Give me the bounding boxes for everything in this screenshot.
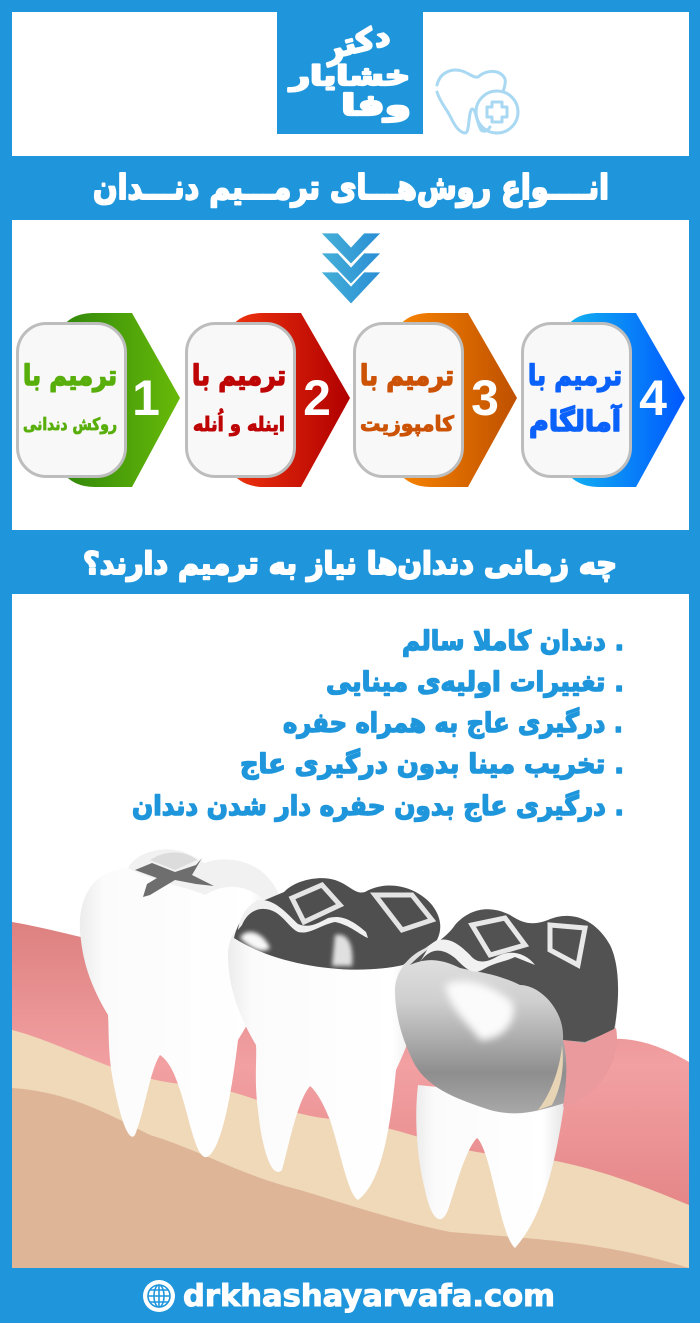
card 1: crown: روکش دندانی (23, 415, 117, 435)
tooth: first with small filling (80, 849, 281, 1157)
icon: globe (143, 1280, 175, 1312)
logo block (277, 12, 423, 134)
text block: list of conditions: . تغییرات اولیه‌ی مینایی (326, 667, 624, 698)
card 4: amalgam: آمالگام (529, 404, 622, 438)
text block: list of conditions: . درگیری عاج بدون حفره دار شدن دندان (132, 790, 624, 822)
panel: symptoms and illustration (12, 594, 689, 1268)
card 3: composite: 3 (471, 370, 499, 426)
card 2: inlay and onlay: ترمیم با (192, 359, 286, 392)
tooth: third with metal crown (395, 909, 618, 1248)
card 3: composite: کامپوزیت (360, 412, 455, 436)
card 4: amalgam: 4 (639, 370, 667, 426)
tooth: second with large filling (228, 878, 440, 1200)
text block: list of conditions (132, 626, 624, 822)
card 2: inlay and onlay: اینله و اُنله (193, 409, 285, 436)
heading: main title: انــــواع روش‌هـــای ترمـــیم دنـــدان (93, 168, 609, 208)
panel: restoration types (12, 220, 689, 530)
text block: list of conditions: . درگیری عاج به همراه حفره (283, 707, 623, 739)
card 3: composite: ترمیم با (360, 359, 454, 392)
card 2: inlay and onlay: 2 (303, 370, 331, 426)
gum tissue (12, 922, 689, 1210)
illustration: three restored teeth in gum (12, 849, 689, 1268)
card 1: crown: ترمیم با (23, 359, 117, 392)
logo block: خشایار (287, 61, 410, 92)
card 1: crown (18, 313, 180, 487)
logo block: وفا (341, 88, 411, 122)
footer: website (143, 1279, 555, 1314)
panel: header (12, 12, 689, 156)
card 1: crown: 1 (132, 370, 160, 426)
card 4: amalgam: ترمیم با (528, 359, 622, 392)
heading: when do teeth need restoration: چه زمانی دندان‌ها نیاز به ترمیم دارند؟ (83, 546, 617, 582)
icon: triple chevron arrow (321, 233, 381, 304)
card 2: inlay and onlay (186, 313, 350, 487)
card 4: amalgam (522, 313, 685, 487)
jaw base (12, 1088, 689, 1268)
text block: list of conditions: . تخریب مینا بدون درگیری عاج (240, 748, 624, 780)
card 3: composite (354, 313, 517, 487)
icon: tooth with plus (437, 70, 518, 133)
text block: list of conditions: . دندان کاملا سالم (402, 626, 624, 657)
bone layer (12, 1030, 689, 1268)
logo block: دکتر (319, 18, 393, 67)
website url: drkhashayarvafa.com (183, 1279, 555, 1314)
